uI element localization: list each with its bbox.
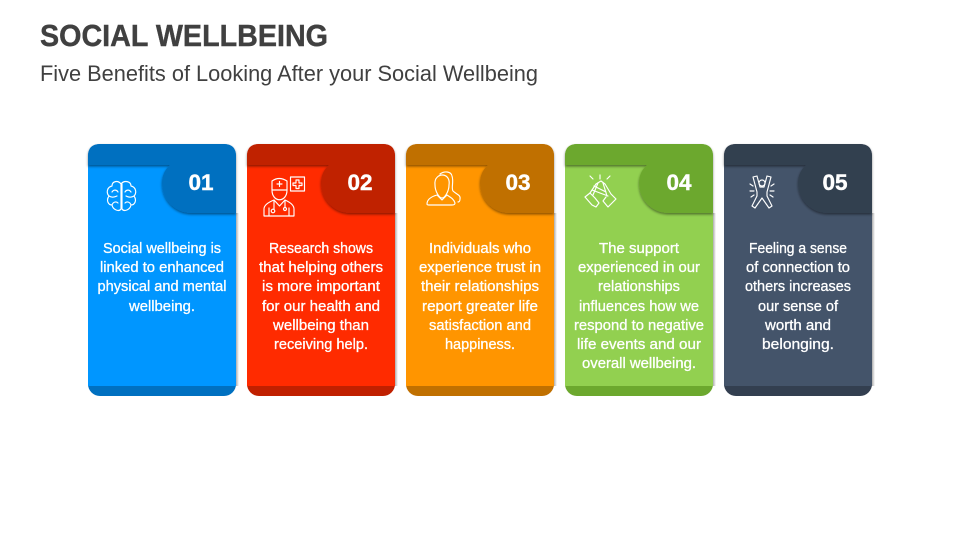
subtitle: Five Benefits of Looking After your Social Wellbeing	[40, 61, 538, 86]
text: card 02: Research shows	[269, 241, 373, 257]
text: card 03: satisfaction and	[429, 318, 531, 334]
number 04: 04	[666, 170, 692, 195]
icon: brain	[107, 182, 136, 210]
text: card 02: is more important	[262, 279, 380, 295]
icon: doctor	[264, 177, 304, 216]
text: card 03: their relationships	[421, 279, 539, 295]
text: card 05: worth and	[764, 318, 831, 334]
text: card 05: of connection to	[746, 260, 850, 276]
text: card 02: wellbeing than	[272, 318, 369, 334]
text: card 04: respond to negative	[574, 318, 704, 334]
text: card 02: receiving help.	[274, 337, 368, 353]
tab 03	[406, 144, 554, 213]
text: card 04: overall wellbeing.	[582, 356, 696, 372]
panel: card 02	[247, 144, 398, 396]
text: card 05	[745, 241, 851, 353]
tab 05	[724, 144, 872, 213]
text: card 01: wellbeing.	[128, 299, 195, 315]
text: card 05: our sense of	[758, 299, 839, 315]
text: card 05: belonging.	[762, 337, 834, 353]
number 01: 01	[188, 170, 214, 195]
text: card 04: relationships	[598, 279, 680, 295]
text: card 01: Social wellbeing is	[103, 241, 221, 257]
text: card 04: influences how we	[579, 299, 699, 315]
number 03: 03	[505, 170, 531, 195]
icon: person	[427, 172, 460, 205]
text: card 05: others increases	[745, 279, 851, 295]
text: card 05: Feeling a sense	[749, 241, 847, 257]
text: card 04: The support	[599, 241, 679, 257]
panel: card 01	[88, 144, 239, 396]
text: card 03: report greater life	[422, 299, 538, 315]
text: card 02: that helping others	[259, 260, 383, 276]
text: card 03: experience trust in	[419, 260, 541, 276]
icon: high five hands	[585, 175, 616, 207]
text: card 04	[574, 241, 704, 372]
number 05: 05	[822, 170, 848, 195]
icon: joyful person	[750, 176, 774, 208]
tab 01	[88, 144, 236, 213]
text: card 04: life events and our	[577, 337, 701, 353]
panel: card 03	[406, 144, 557, 396]
tab 04	[565, 144, 713, 213]
text: card 04: experienced in our	[578, 260, 700, 276]
text: card 03	[419, 241, 541, 353]
text: card 03: happiness.	[445, 337, 515, 353]
title: SOCIAL WELLBEING	[40, 18, 328, 53]
number 02: 02	[347, 170, 373, 195]
text: card 01	[98, 241, 226, 315]
panel: card 05	[724, 144, 875, 396]
text: card 02: for our health and	[262, 299, 380, 315]
text: card 03: Individuals who	[429, 241, 531, 257]
text: card 01: linked to enhanced	[100, 260, 224, 276]
panel: card 04	[565, 144, 716, 396]
text: card 02	[259, 241, 383, 353]
text: card 01: physical and mental	[98, 279, 226, 295]
tab 02	[247, 144, 395, 213]
